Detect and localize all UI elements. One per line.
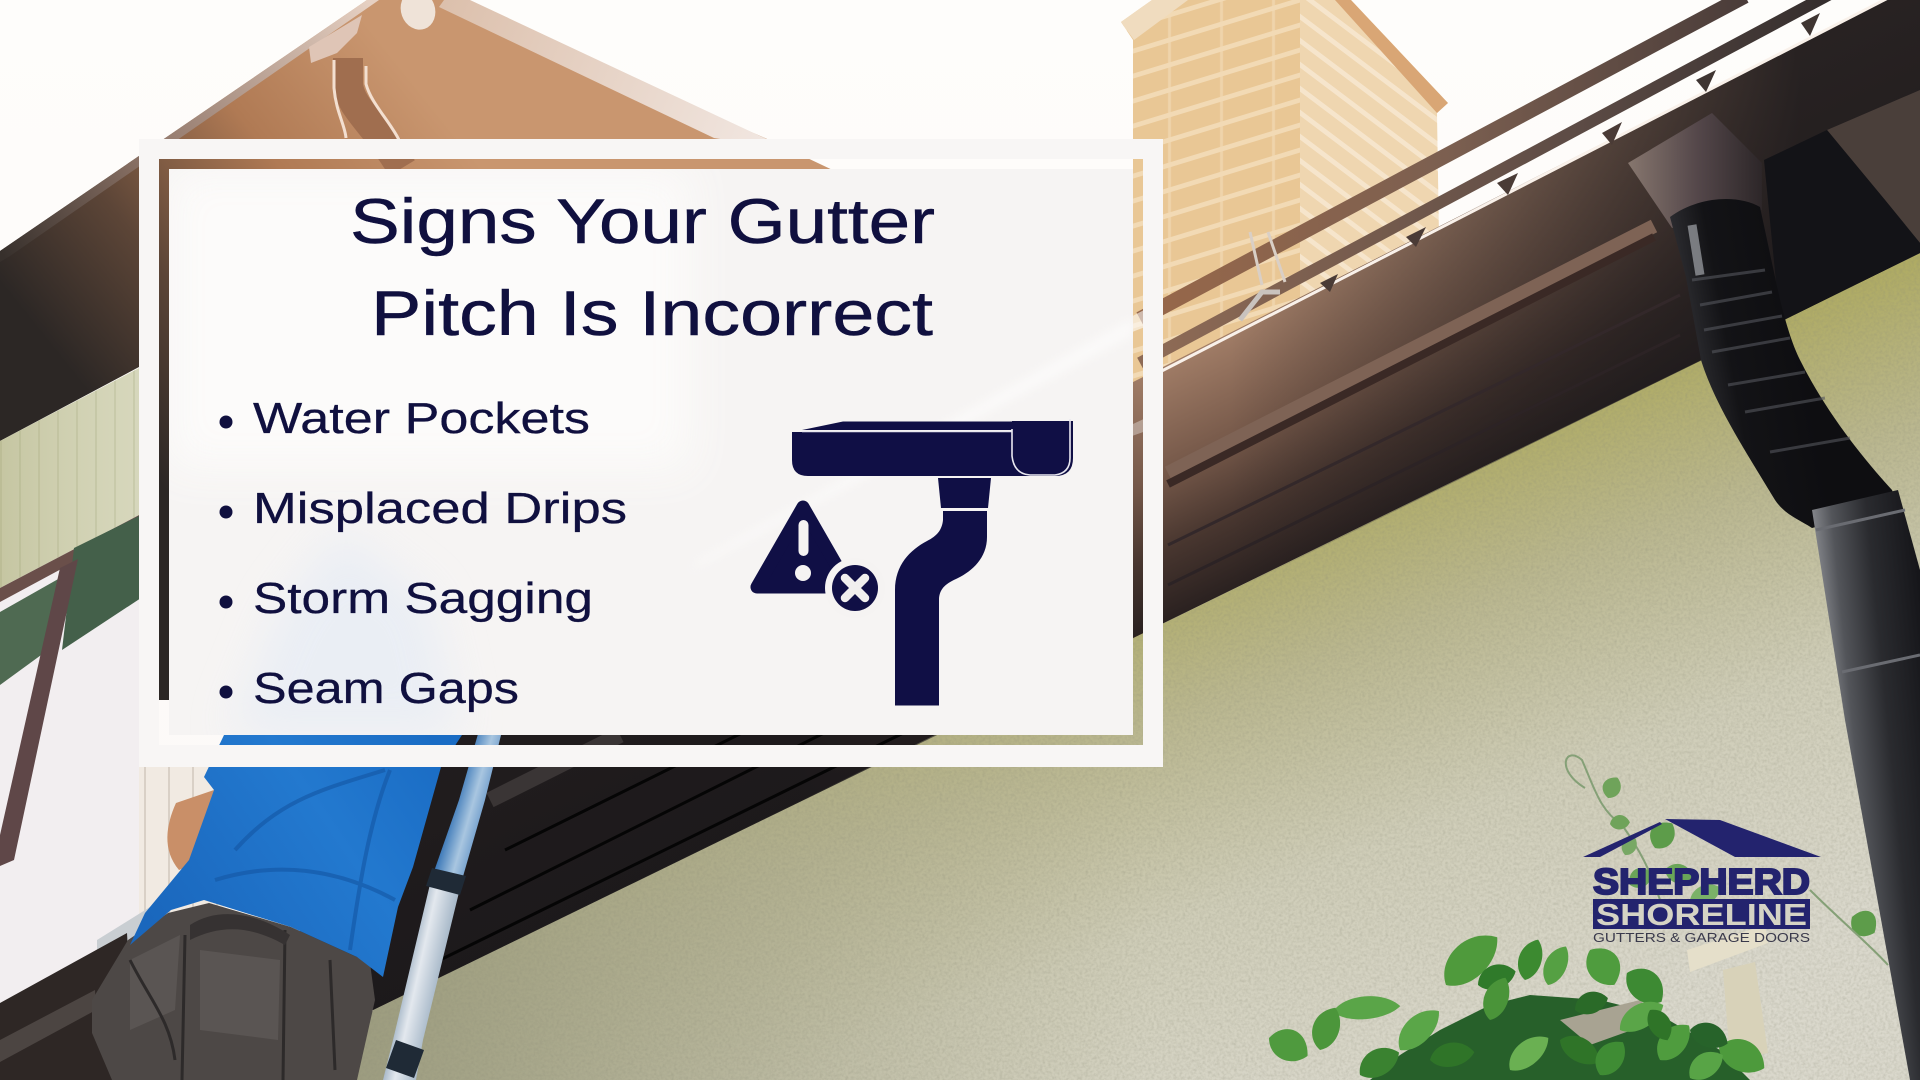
stucco wall (340, 253, 1920, 1080)
upper-left roof and soffit (0, 0, 1150, 700)
title: Pitch Is Incorrect (371, 279, 934, 349)
ladder (431, 727, 503, 880)
bullet list: Water Pockets (253, 394, 590, 443)
bullet list: Misplaced Drips (253, 484, 627, 533)
worker on ladder (92, 727, 503, 1080)
faint photo show-through (169, 169, 1133, 735)
vine (1566, 755, 1888, 965)
bullet list: Seam Gaps (253, 664, 519, 713)
window frame behind plants (1687, 925, 1768, 972)
panel: white frame with signs list (139, 139, 1163, 767)
outer frame (139, 139, 1163, 767)
plants (1263, 755, 1888, 1080)
trousers (92, 903, 375, 1080)
logo roof (1583, 819, 1821, 857)
left siding and window (0, 367, 224, 1080)
roof rail and gutter lip (1140, 0, 1890, 377)
arm (167, 790, 214, 870)
bullet list (220, 394, 627, 713)
logo wordmark top: SHEPHERD (1593, 861, 1810, 902)
brick chimney (1121, 0, 1448, 440)
logo tagline: GUTTERS & GARAGE DOORS (1593, 930, 1810, 945)
icon: warning triangle with x badge (757, 507, 885, 618)
inner panel (169, 169, 1133, 735)
title: Signs Your Gutter (350, 187, 935, 257)
logo wordmark bottom: SHORELINE (1596, 897, 1807, 932)
downpipe (1628, 90, 1920, 1080)
bullet list: Storm Sagging (253, 574, 593, 623)
dark eave and fascia with gutter (300, 0, 1920, 1010)
shirt (130, 735, 462, 977)
icon: gutter and downspout (792, 419, 1073, 706)
logo: Shepherd Shoreline (1583, 819, 1821, 945)
title (350, 187, 935, 349)
lens-flare streaks (1030, 300, 1163, 465)
